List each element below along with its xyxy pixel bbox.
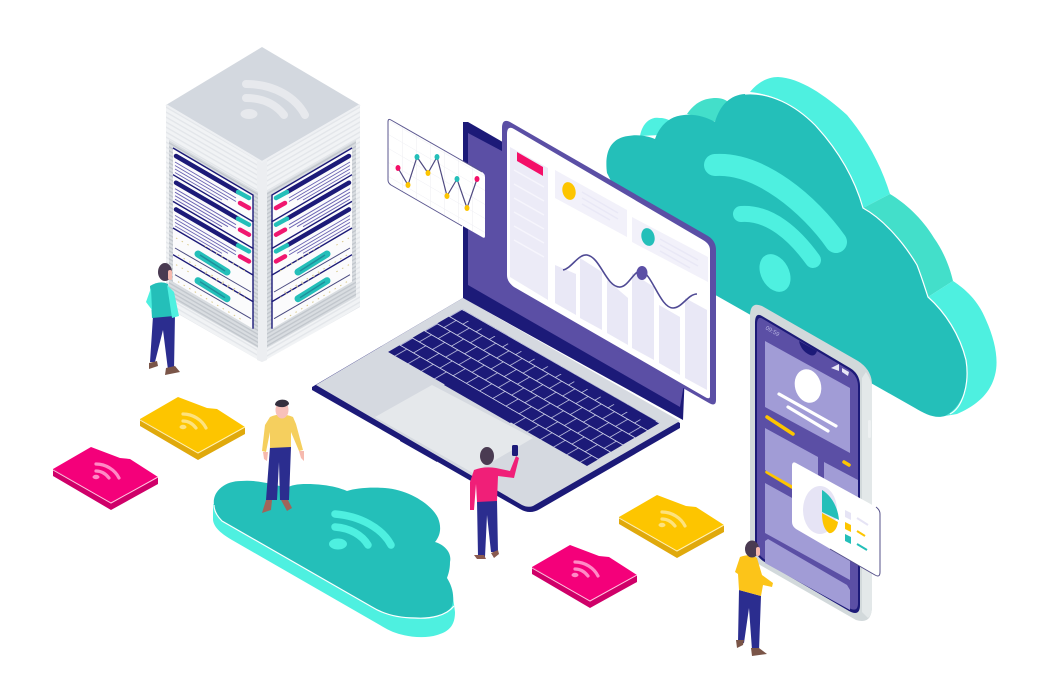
profile panel (765, 341, 850, 453)
laptop lid back (463, 122, 690, 420)
line chart (563, 255, 697, 308)
server right side (262, 105, 360, 362)
small cloud (213, 481, 455, 637)
phone side button (868, 420, 871, 438)
server rack (166, 47, 360, 362)
server units left (173, 148, 253, 329)
person: teal shirt by server (146, 263, 180, 375)
folder: pink right (532, 545, 637, 608)
small cloud rim (214, 505, 454, 618)
laptop (312, 121, 716, 512)
bar chart (555, 258, 707, 390)
person: yellow sweater on cloud (262, 400, 304, 513)
server units right (272, 148, 352, 329)
folder: yellow left (140, 397, 245, 460)
phone body (750, 305, 872, 621)
chart card: zigzag line (388, 119, 485, 238)
icon: wifi on server (240, 84, 305, 119)
yellow bars (767, 417, 849, 487)
phone status icons (831, 364, 849, 376)
laptop base (312, 298, 680, 512)
laptop screen (502, 121, 716, 404)
card: yellow dot (555, 170, 627, 237)
phone screen (755, 315, 860, 613)
folder: yellow right (619, 495, 724, 558)
cloud side depth (640, 77, 997, 416)
phone time: 09:59 (764, 326, 781, 339)
icon: wifi on small cloud (329, 514, 391, 550)
keyboard (388, 309, 660, 466)
sidebar (510, 147, 548, 300)
phone (750, 305, 872, 621)
pie chart card (792, 462, 880, 576)
server top (166, 47, 360, 162)
folder: pink left (53, 447, 158, 510)
server left side (166, 105, 262, 362)
big cloud (606, 77, 997, 417)
phone panels (765, 428, 858, 610)
small cloud side (213, 500, 455, 637)
icon: wifi on big cloud (715, 165, 836, 297)
card: teal dot (632, 217, 708, 282)
cloud front face (606, 94, 967, 417)
person: pink shirt with phone (470, 445, 519, 559)
small cloud face (214, 481, 453, 618)
cloud rim highlight (745, 94, 967, 414)
person: yellow shirt by phone (735, 540, 773, 656)
trackpad (375, 385, 533, 473)
phone notch (799, 341, 817, 356)
